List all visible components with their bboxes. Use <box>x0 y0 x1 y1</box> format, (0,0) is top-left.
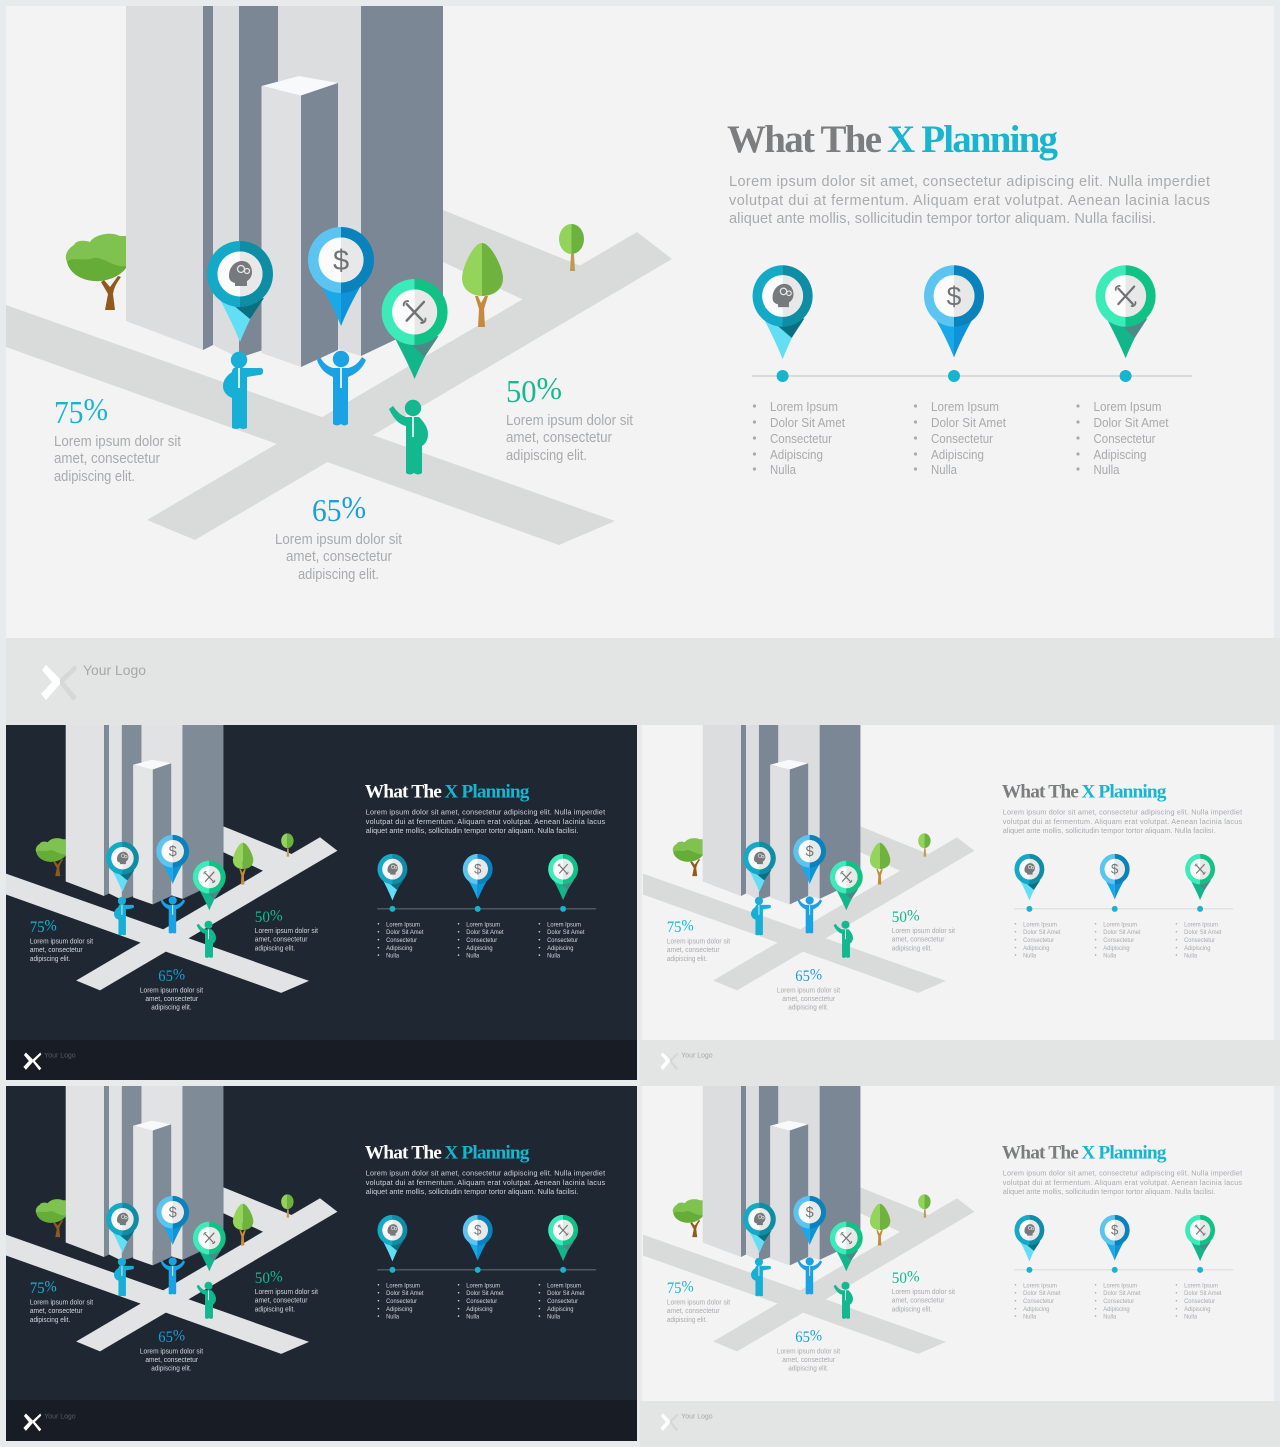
slide content: % <box>907 907 920 924</box>
slide content: 50 <box>255 1270 271 1287</box>
slide content: Nulla <box>1103 953 1117 960</box>
slide content: adipiscing elit. <box>788 1003 829 1012</box>
slide content: 75 <box>667 919 683 936</box>
slide content: Dolor Sit Amet <box>1023 929 1061 936</box>
slide content: Dolor Sit Amet <box>547 929 585 936</box>
bullet list 2: Nulla <box>931 463 957 477</box>
slide content: aliquet ante mollis, sollicitudin tempor tortor aliquam. Nulla facilisi. <box>366 826 578 835</box>
slide content: 65 <box>795 968 811 985</box>
slide content: amet, consectetur <box>30 1306 83 1315</box>
title <box>727 118 1058 161</box>
slide content: adipiscing elit. <box>255 1305 295 1314</box>
pin row: head icon <box>753 265 813 359</box>
stat: 65%: 65 <box>312 492 344 528</box>
slide content: 65 <box>158 968 174 985</box>
logo: Your Logo <box>83 662 146 678</box>
slide content: % <box>45 918 57 935</box>
slide content: Lorem Ipsum <box>1184 921 1218 928</box>
footer band <box>6 1040 637 1080</box>
bullet list 3: Adipiscing <box>1094 448 1147 462</box>
slide content: amet, consectetur <box>892 935 945 944</box>
slide content: % <box>45 1279 57 1296</box>
slide content: amet, consectetur <box>145 1355 199 1364</box>
slide content: Dolor Sit Amet <box>1184 1290 1222 1297</box>
slide content: amet, consectetur <box>30 945 83 954</box>
stat: 75%: % <box>83 391 108 427</box>
slide content: What The <box>1002 1143 1079 1164</box>
slide content: amet, consectetur <box>782 1355 836 1364</box>
slide content: % <box>173 966 185 983</box>
slide content: Adipiscing <box>1023 1306 1050 1313</box>
stat: 75% <box>54 391 181 485</box>
footer band <box>640 1040 1280 1086</box>
bullet list 3: Lorem Ipsum <box>1094 400 1162 414</box>
slide content: Lorem ipsum dolor sit amet, consectetur adipiscing elit. Nulla imperdiet <box>1003 807 1242 816</box>
slide content: Lorem ipsum dolor sit <box>667 937 730 946</box>
slide content: Adipiscing <box>547 1306 574 1313</box>
slide content: volutpat dui at fermentum. Aliquam erat volutpat. Aenean lacinia lacus <box>1003 1178 1242 1187</box>
slide content: Consectetur <box>547 1298 578 1305</box>
slide content: volutpat dui at fermentum. Aliquam erat volutpat. Aenean lacinia lacus <box>366 817 605 826</box>
intro paragraph: aliquet ante mollis, sollicitudin tempor tortor aliquam. Nulla facilisi. <box>729 211 1156 227</box>
slide content: Nulla <box>1023 1314 1037 1321</box>
slide content: Lorem ipsum dolor sit <box>30 937 93 946</box>
slide content: Dolor Sit Amet <box>1103 929 1141 936</box>
slide content: Lorem Ipsum <box>386 921 420 928</box>
slide content: Lorem Ipsum <box>1103 921 1137 928</box>
slide content: adipiscing elit. <box>151 1003 192 1012</box>
slide content: Nulla <box>1023 953 1037 960</box>
slide content: Consectetur <box>386 937 417 944</box>
slide content: X Planning <box>444 1143 530 1164</box>
bullet list 3: Consectetur <box>1094 432 1156 446</box>
slide content: Dolor Sit Amet <box>1023 1290 1061 1297</box>
slide content: X Planning <box>1081 782 1167 803</box>
slide content: adipiscing elit. <box>667 1315 707 1324</box>
stat: 50% <box>506 370 633 464</box>
slide content: adipiscing elit. <box>30 1315 70 1324</box>
slide content: Consectetur <box>1023 1298 1054 1305</box>
panel: large light slide <box>6 6 1280 725</box>
bullet list 3 <box>1076 400 1169 477</box>
slide content: amet, consectetur <box>667 945 720 954</box>
slide content: Lorem ipsum dolor sit amet, consectetur adipiscing elit. Nulla imperdiet <box>366 807 605 816</box>
slide content: amet, consectetur <box>892 1296 945 1305</box>
stat: 50%: Lorem ipsum dolor sit <box>506 413 633 429</box>
slide content: % <box>907 1268 920 1285</box>
bullet list 1: Nulla <box>770 463 796 477</box>
bullet list 2: Dolor Sit Amet <box>931 416 1006 430</box>
slide content: aliquet ante mollis, sollicitudin tempor tortor aliquam. Nulla facilisi. <box>1003 1187 1215 1196</box>
slide content: Your Logo <box>681 1052 713 1059</box>
isometric towers <box>126 6 443 367</box>
slide content <box>643 725 1242 1070</box>
slide content: Dolor Sit Amet <box>386 929 424 936</box>
slide content: Consectetur <box>1023 937 1054 944</box>
slide content: Adipiscing <box>1103 945 1130 952</box>
slide content: % <box>173 1327 185 1344</box>
slide content: What The <box>365 782 442 803</box>
slide content: Nulla <box>386 1314 400 1321</box>
stat: 65%: % <box>341 489 366 525</box>
slide content: adipiscing elit. <box>892 944 932 953</box>
stat: 65% <box>275 489 402 583</box>
bullet list 1: Lorem Ipsum <box>770 400 838 414</box>
slide content: 50 <box>892 909 908 926</box>
slide content: Dolor Sit Amet <box>386 1290 424 1297</box>
slide content: Consectetur <box>466 1298 497 1305</box>
slide content: Adipiscing <box>1184 945 1211 952</box>
panel: light slide, row 3 <box>640 1086 1280 1447</box>
slide content: Adipiscing <box>1103 1306 1130 1313</box>
slide content: Nulla <box>1103 1314 1117 1321</box>
logo <box>41 662 146 701</box>
slide content: Consectetur <box>1184 937 1215 944</box>
stat: 75%: adipiscing elit. <box>54 469 135 485</box>
slide content: Nulla <box>386 953 400 960</box>
slide content: Lorem ipsum dolor sit <box>892 1287 955 1296</box>
slide content: Lorem Ipsum <box>1023 1282 1057 1289</box>
slide content: Lorem ipsum dolor sit <box>667 1298 730 1307</box>
slide content: Adipiscing <box>386 945 413 952</box>
intro paragraph: Lorem ipsum dolor sit amet, consectetur adipiscing elit. Nulla imperdiet <box>729 174 1210 190</box>
stat: 50%: % <box>537 370 562 406</box>
slide content: % <box>270 907 283 924</box>
slide content: Lorem ipsum dolor sit <box>777 1346 840 1355</box>
slide content: Lorem Ipsum <box>466 1282 500 1289</box>
slide content: adipiscing elit. <box>151 1364 192 1373</box>
slide content: Consectetur <box>547 937 578 944</box>
slide content: Your Logo <box>44 1413 76 1420</box>
stat: 75%: 75 <box>54 394 86 430</box>
slide content: 75 <box>30 919 46 936</box>
slide content: Dolor Sit Amet <box>466 1290 504 1297</box>
slide content: Dolor Sit Amet <box>547 1290 585 1297</box>
bullet list 1 <box>753 400 845 477</box>
slide content: Lorem ipsum dolor sit <box>140 985 203 994</box>
slide content: % <box>682 1279 694 1296</box>
intro paragraph: volutpat dui at fermentum. Aliquam erat volutpat. Aenean lacinia lacus <box>729 193 1210 209</box>
slide content: Lorem Ipsum <box>466 921 500 928</box>
bullet list 3: Nulla <box>1094 463 1120 477</box>
slide content: What The <box>1002 782 1079 803</box>
slide content: Adipiscing <box>386 1306 413 1313</box>
slide content: amet, consectetur <box>782 994 836 1003</box>
bullet list 2 <box>914 400 1006 477</box>
slide content <box>6 1086 605 1431</box>
slide content: Nulla <box>1184 1314 1198 1321</box>
footer band <box>640 1401 1280 1447</box>
slide content: Adipiscing <box>1023 945 1050 952</box>
slide content: Lorem Ipsum <box>1023 921 1057 928</box>
slide content: Your Logo <box>681 1413 713 1420</box>
slide content: Lorem ipsum dolor sit <box>777 985 840 994</box>
slide content: volutpat dui at fermentum. Aliquam erat volutpat. Aenean lacinia lacus <box>366 1178 605 1187</box>
title: What The <box>727 118 882 161</box>
timeline <box>752 370 1192 382</box>
stat: 50%: 50 <box>506 373 538 409</box>
slide content: adipiscing elit. <box>255 944 295 953</box>
map pin: tools icon <box>382 279 448 379</box>
slide content <box>643 1086 1242 1431</box>
slide content: Lorem ipsum dolor sit amet, consectetur adipiscing elit. Nulla imperdiet <box>366 1168 605 1177</box>
slide content: adipiscing elit. <box>667 954 707 963</box>
slide content: 65 <box>158 1329 174 1346</box>
slide content: Consectetur <box>386 1298 417 1305</box>
stat: 50%: amet, consectetur <box>506 430 612 446</box>
footer band <box>6 638 1280 725</box>
pin row: tools icon <box>1096 265 1156 358</box>
slide content: Consectetur <box>466 937 497 944</box>
slide content: 50 <box>892 1270 908 1287</box>
slide content: Adipiscing <box>466 945 493 952</box>
stat: 50%: adipiscing elit. <box>506 448 587 464</box>
stat: 75%: Lorem ipsum dolor sit <box>54 434 181 450</box>
person: green <box>389 400 428 474</box>
stat: 65%: amet, consectetur <box>286 549 392 565</box>
slide content: Adipiscing <box>1184 1306 1211 1313</box>
bullet list 2: Consectetur <box>931 432 993 446</box>
panel: dark slide, row 3 <box>6 1086 637 1441</box>
slide content: aliquet ante mollis, sollicitudin tempor tortor aliquam. Nulla facilisi. <box>366 1187 578 1196</box>
stat: 65%: Lorem ipsum dolor sit <box>275 532 402 548</box>
person: blue <box>317 351 366 426</box>
slide content: Lorem ipsum dolor sit <box>30 1298 93 1307</box>
slide content: amet, consectetur <box>255 935 308 944</box>
bullet list 1: Adipiscing <box>770 448 823 462</box>
intro paragraph <box>729 174 1210 227</box>
tree: small oval <box>559 224 584 271</box>
slide content: % <box>682 918 694 935</box>
slide content: amet, consectetur <box>145 994 199 1003</box>
bullet list 2: Adipiscing <box>931 448 984 462</box>
panel: light slide, row 2 <box>640 725 1280 1086</box>
slide content: Lorem Ipsum <box>386 1282 420 1289</box>
slide content: Dolor Sit Amet <box>1184 929 1222 936</box>
slide content: Nulla <box>466 1314 480 1321</box>
slide content: What The <box>365 1143 442 1164</box>
slide content: 65 <box>795 1329 811 1346</box>
slide content: volutpat dui at fermentum. Aliquam erat volutpat. Aenean lacinia lacus <box>1003 817 1242 826</box>
slide content: Dolor Sit Amet <box>466 929 504 936</box>
slide content: Lorem ipsum dolor sit <box>140 1346 203 1355</box>
slide content: Dolor Sit Amet <box>1103 1290 1141 1297</box>
slide content: Consectetur <box>1103 937 1134 944</box>
panel: dark slide, row 2 <box>6 725 637 1080</box>
slide content: % <box>810 966 822 983</box>
tree: cone <box>462 243 503 327</box>
slide content: Nulla <box>547 953 561 960</box>
road network <box>6 210 672 545</box>
bullet list 3: Dolor Sit Amet <box>1094 416 1169 430</box>
slide content: % <box>270 1268 283 1285</box>
slide content: amet, consectetur <box>255 1296 308 1305</box>
slide content: adipiscing elit. <box>30 954 70 963</box>
slide content: Nulla <box>466 953 480 960</box>
slide content: Consectetur <box>1103 1298 1134 1305</box>
slide content: Lorem Ipsum <box>1184 1282 1218 1289</box>
slide content: Lorem Ipsum <box>547 1282 581 1289</box>
slide content: Nulla <box>1184 953 1198 960</box>
stat: 65%: adipiscing elit. <box>298 567 379 583</box>
slide content: amet, consectetur <box>667 1306 720 1315</box>
person: cyan <box>223 352 263 429</box>
pin row: dollar icon <box>924 265 984 357</box>
slide content: Consectetur <box>1184 1298 1215 1305</box>
slide content: adipiscing elit. <box>892 1305 932 1314</box>
stat: 75%: amet, consectetur <box>54 451 160 467</box>
slide content: Your Logo <box>44 1052 76 1059</box>
slide content: Lorem ipsum dolor sit <box>255 1287 318 1296</box>
footer band <box>6 1400 637 1441</box>
tree: large bush <box>66 234 126 310</box>
slide content: Nulla <box>547 1314 561 1321</box>
slide content: X Planning <box>444 782 530 803</box>
slide content: Lorem ipsum dolor sit <box>892 926 955 935</box>
slide content: Adipiscing <box>466 1306 493 1313</box>
slide content: % <box>810 1327 822 1344</box>
slide content: 75 <box>667 1280 683 1297</box>
map pin: dollar icon <box>308 227 374 326</box>
slide content: X Planning <box>1081 1143 1167 1164</box>
slide content: Lorem ipsum dolor sit amet, consectetur adipiscing elit. Nulla imperdiet <box>1003 1168 1242 1177</box>
slide content: 75 <box>30 1280 46 1297</box>
slide content: Lorem Ipsum <box>547 921 581 928</box>
slide content: aliquet ante mollis, sollicitudin tempor tortor aliquam. Nulla facilisi. <box>1003 826 1215 835</box>
slide content: Lorem ipsum dolor sit <box>255 926 318 935</box>
slide content: adipiscing elit. <box>788 1364 829 1373</box>
slide content: Lorem Ipsum <box>1103 1282 1137 1289</box>
slide content: Adipiscing <box>547 945 574 952</box>
slide content: 50 <box>255 909 271 926</box>
bullet list 1: Consectetur <box>770 432 832 446</box>
bullet list 2: Lorem Ipsum <box>931 400 999 414</box>
map pin: head icon <box>207 241 273 342</box>
title: X Planning <box>887 118 1058 161</box>
bullet list 1: Dolor Sit Amet <box>770 416 845 430</box>
slide content <box>6 725 605 1070</box>
